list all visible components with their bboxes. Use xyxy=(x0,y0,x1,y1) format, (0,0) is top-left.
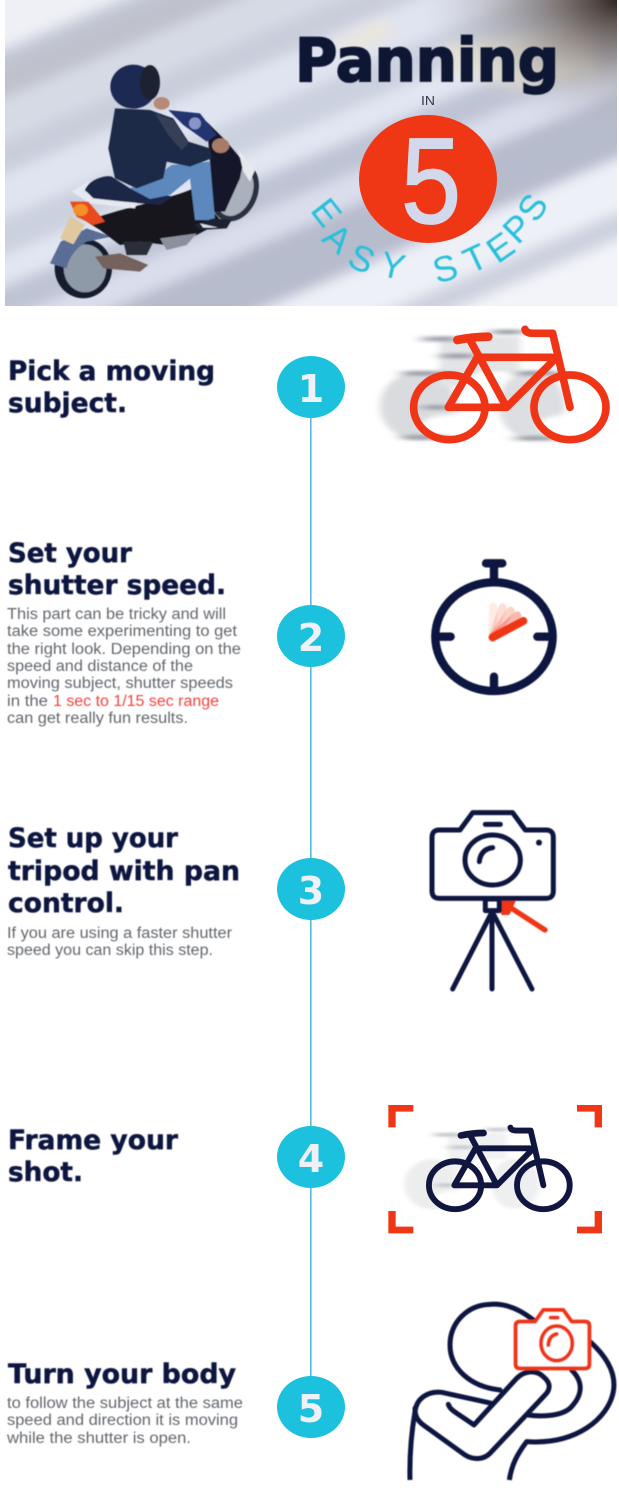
number plate xyxy=(60,217,85,244)
arc text: easy steps: E xyxy=(479,224,522,271)
subtitle: in: IN xyxy=(421,94,435,108)
heading: step 2: shutter speed. xyxy=(8,570,226,601)
handlebar and hand xyxy=(168,110,217,142)
rear fender xyxy=(50,228,112,268)
heading: step 1: Pick a moving xyxy=(8,356,215,387)
body text: step 3: If you are using a faster shutter xyxy=(7,925,232,942)
rear wheel xyxy=(55,238,112,298)
body text: step 2: speed and distance of the xyxy=(7,658,193,675)
step 2 xyxy=(7,538,553,727)
body text: step 2: take some experimenting to get xyxy=(7,623,238,640)
body text: step 5: to follow the subject at the same xyxy=(7,1395,243,1412)
body text: step 2 xyxy=(7,606,241,727)
step 4 xyxy=(8,1105,602,1233)
heading: step 1 xyxy=(8,356,215,419)
seat xyxy=(85,176,173,205)
number badge 4: 4 xyxy=(298,1137,324,1181)
arc text: easy steps xyxy=(303,186,556,291)
icon: framed navy bicycle xyxy=(388,1105,602,1233)
badge: number 5 xyxy=(359,113,497,249)
viewfinder corners xyxy=(388,1105,602,1233)
body text: step 5: while the shutter is open. xyxy=(6,1430,191,1447)
front wheel xyxy=(202,155,267,229)
icon: camera on tripod xyxy=(432,813,553,989)
arc text: easy steps: S xyxy=(428,245,462,291)
badge: number 5: 5 xyxy=(401,113,461,249)
number badge 3 xyxy=(277,858,345,920)
number badge 5: 5 xyxy=(298,1387,324,1431)
front shield xyxy=(207,122,243,212)
arc text: easy steps: P xyxy=(494,205,540,251)
panel: hero photo header xyxy=(5,0,617,306)
body text: step 3: speed you can skip this step. xyxy=(7,942,213,959)
bicycle xyxy=(404,1128,570,1209)
timeline line xyxy=(310,400,312,1400)
photo: blurred road background xyxy=(5,0,617,306)
arc text: easy steps: T xyxy=(457,235,494,282)
heading: step 3: tripod with pan xyxy=(8,856,240,887)
heading: step 5: Turn your body xyxy=(8,1359,236,1390)
heading: step 2: Set your xyxy=(8,538,133,569)
red camera xyxy=(516,1310,589,1368)
heading: step 3: control. xyxy=(8,888,124,919)
body text: step 2: moving subject, shutter speeds xyxy=(7,675,233,692)
jeans xyxy=(130,162,215,220)
heading: step 4: Frame your xyxy=(8,1125,179,1156)
number badge 1: 1 xyxy=(298,367,324,411)
arc text: easy steps: S xyxy=(342,235,381,282)
heading: step 2 xyxy=(8,538,226,601)
title: Panning xyxy=(295,26,559,96)
icon: person turning with camera xyxy=(410,1304,614,1480)
body text: step 5 xyxy=(6,1395,243,1447)
scooter body xyxy=(87,188,222,245)
body text: step 2: can get really fun results. xyxy=(7,710,188,727)
body text: step 2: in the xyxy=(7,693,48,710)
heading: step 1: subject. xyxy=(8,388,127,419)
icon: red bicycle with motion blur xyxy=(380,329,606,440)
jacket xyxy=(108,108,212,188)
tail light xyxy=(70,202,105,225)
step 3 xyxy=(7,813,553,989)
number badge 3: 3 xyxy=(298,869,324,913)
step 1 xyxy=(8,329,606,440)
arc text: easy steps: S xyxy=(509,186,556,228)
white trim xyxy=(72,180,137,208)
body text: step 2: the right look. Depending on the xyxy=(7,641,241,658)
heading: step 4 xyxy=(8,1125,179,1188)
body text: step 2: 1 sec to 1/15 sec range xyxy=(53,693,219,710)
body text: step 2: This part can be tricky and will xyxy=(7,606,226,623)
shoe xyxy=(193,218,232,230)
heading: step 4: shot. xyxy=(8,1157,83,1188)
body text: step 5: speed and direction it is moving xyxy=(7,1412,238,1429)
body text: step 3 xyxy=(7,925,232,959)
photo: scooter and rider xyxy=(50,65,267,298)
heading: step 3: Set up your xyxy=(8,823,179,854)
face xyxy=(154,97,170,110)
heading: step 3 xyxy=(8,823,240,919)
number badge 4 xyxy=(277,1126,345,1188)
arc text: easy steps: Y xyxy=(377,243,409,288)
step 5 xyxy=(6,1304,614,1480)
number badge 2 xyxy=(277,605,345,667)
icon: stopwatch xyxy=(435,563,553,691)
arc text: easy steps: A xyxy=(315,215,360,262)
number badge 2: 2 xyxy=(298,616,324,660)
number badge 1 xyxy=(277,356,345,418)
helmet xyxy=(110,65,156,109)
arc text: easy steps: E xyxy=(303,190,350,234)
number badge 5 xyxy=(277,1376,345,1438)
